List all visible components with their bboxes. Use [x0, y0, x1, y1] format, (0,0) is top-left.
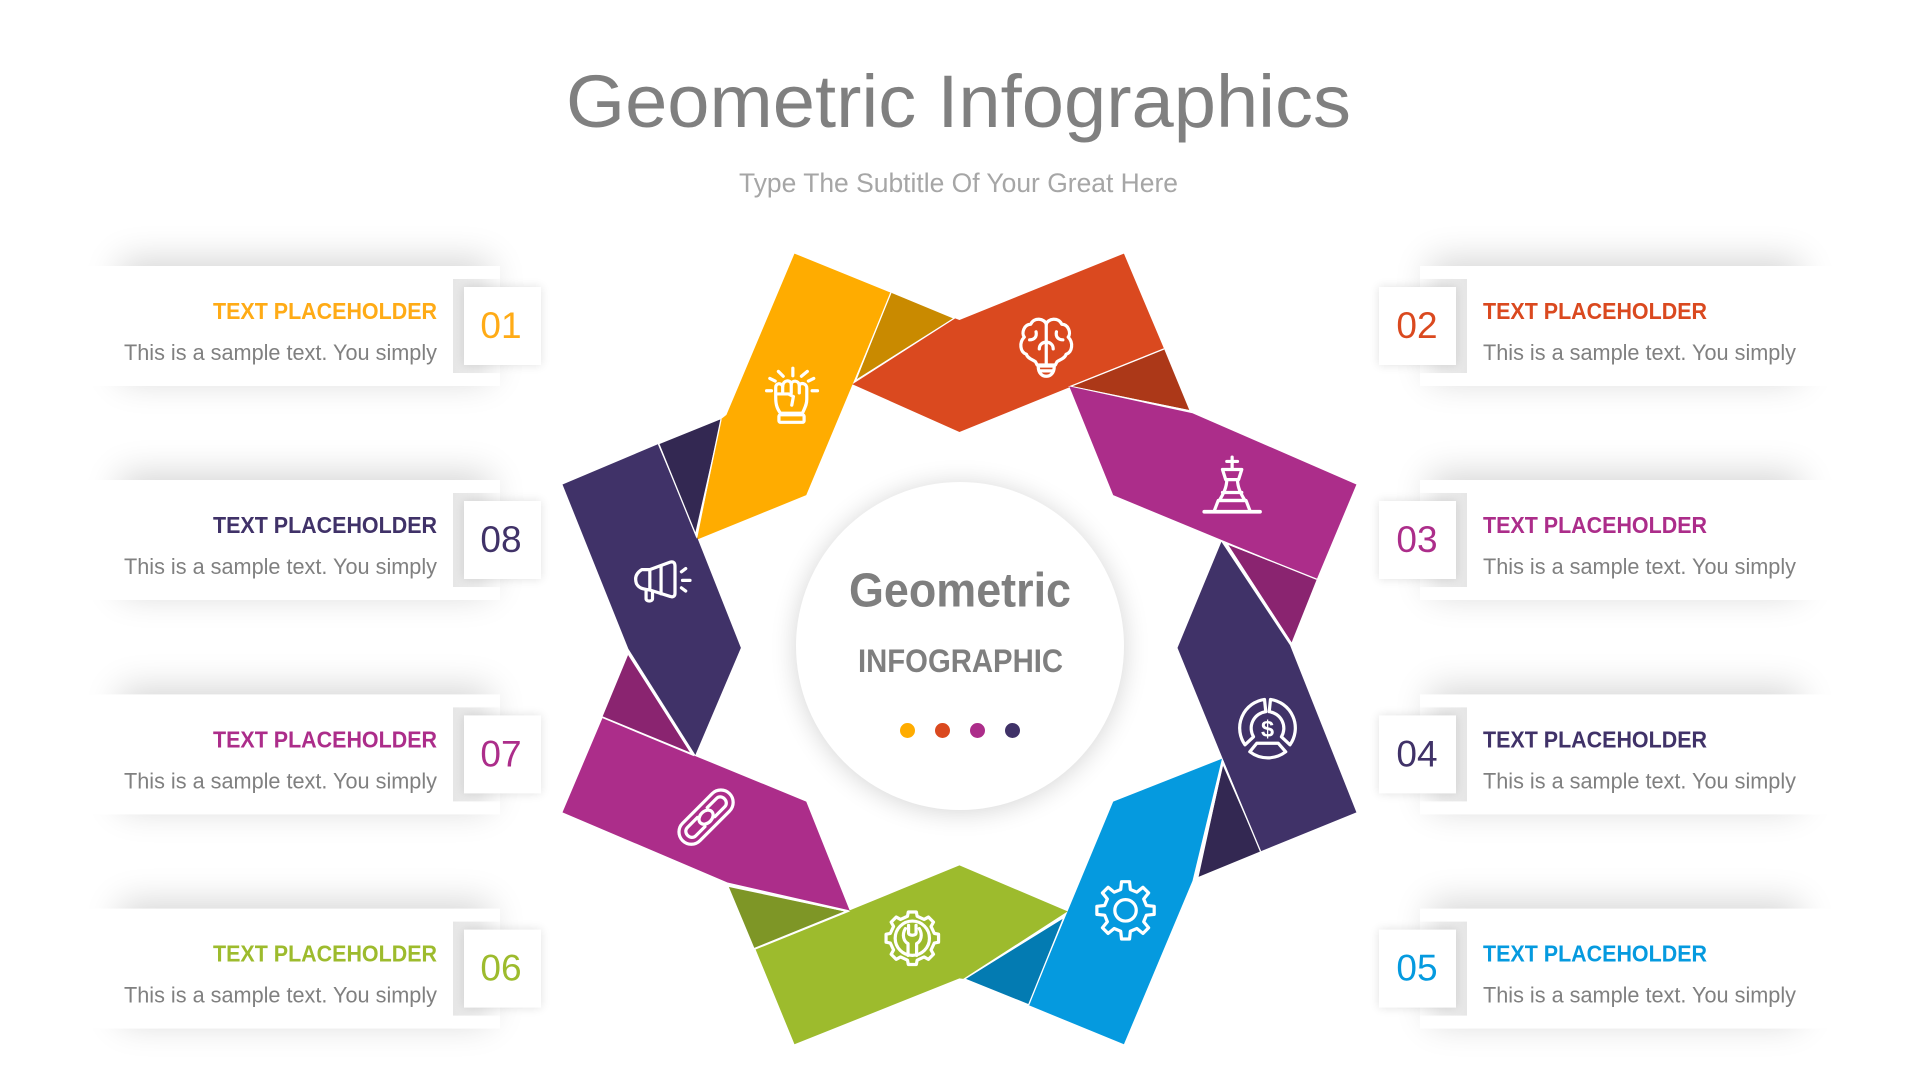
- card 02: [1379, 260, 1835, 386]
- center heading: Geometric: [849, 564, 1071, 618]
- card 04: [1379, 688, 1835, 814]
- band 07 magenta: [562, 654, 850, 910]
- band 03 purple: [1069, 386, 1356, 644]
- band 04 navy: [1177, 542, 1356, 877]
- card 07: TEXT PLACEHOLDER: [213, 726, 437, 752]
- card 02: 02: [1396, 305, 1438, 346]
- card 07: This is a sample text. You simply: [124, 768, 437, 793]
- card 04: TEXT PLACEHOLDER: [1483, 726, 1707, 752]
- icon: dollar target: $: [1261, 716, 1274, 742]
- card 05: 05: [1396, 948, 1438, 989]
- card 06: This is a sample text. You simply: [124, 983, 437, 1008]
- icon: wrench gear: [886, 912, 939, 964]
- card 07: 07: [480, 733, 522, 774]
- band 02 red: [852, 254, 1190, 432]
- card 07: [85, 688, 541, 814]
- card 08: 08: [480, 519, 522, 560]
- band 06 green: [729, 865, 1068, 1044]
- card 05: [1379, 903, 1835, 1029]
- icon: dollar target: [1240, 699, 1295, 758]
- card 01: This is a sample text. You simply: [124, 340, 437, 365]
- card 06: [85, 903, 541, 1029]
- card 01: 01: [480, 305, 522, 346]
- icon: brain bulb: [1021, 319, 1072, 376]
- card 08: [85, 474, 541, 600]
- octagram ribbon diagram: [562, 254, 1356, 1044]
- center circle: [796, 482, 1124, 812]
- card 03: [1379, 474, 1835, 600]
- card 06: 06: [480, 948, 522, 989]
- card 02: This is a sample text. You simply: [1483, 340, 1796, 365]
- card 08: This is a sample text. You simply: [124, 554, 437, 579]
- card 04: This is a sample text. You simply: [1483, 768, 1796, 793]
- card 05: This is a sample text. You simply: [1483, 983, 1796, 1008]
- subtitle: Type The Subtitle Of Your Great Here: [739, 168, 1178, 198]
- icon: raised fist: [767, 368, 817, 422]
- card 05: TEXT PLACEHOLDER: [1483, 941, 1707, 967]
- center subheading: INFOGRAPHIC: [858, 643, 1063, 679]
- card 02: TEXT PLACEHOLDER: [1483, 298, 1707, 324]
- card 03: This is a sample text. You simply: [1483, 554, 1796, 579]
- icon: chess king: [1204, 457, 1260, 512]
- center dots: [900, 723, 1020, 738]
- card 08: TEXT PLACEHOLDER: [213, 512, 437, 538]
- band 01 orange: [697, 254, 954, 540]
- card 03: 03: [1396, 519, 1438, 560]
- card 01: [85, 260, 541, 386]
- icon: chain link: [674, 785, 738, 849]
- card 06: TEXT PLACEHOLDER: [213, 941, 437, 967]
- card 01: TEXT PLACEHOLDER: [213, 298, 437, 324]
- band 08 navy: [562, 419, 741, 755]
- icon: gear: [1097, 882, 1154, 939]
- icon: megaphone: [636, 562, 690, 601]
- card 04: 04: [1396, 733, 1438, 774]
- title: Geometric Infographics: [566, 60, 1351, 143]
- card 03: TEXT PLACEHOLDER: [1483, 512, 1707, 538]
- band 05 blue: [964, 759, 1222, 1044]
